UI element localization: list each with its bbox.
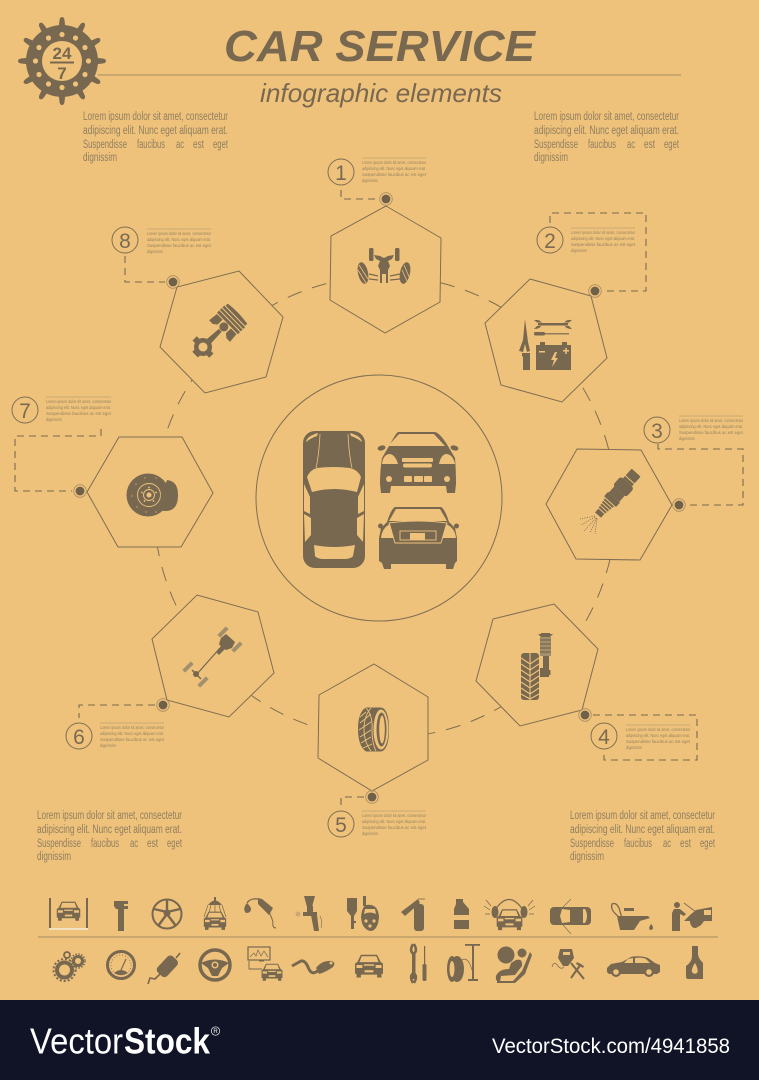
- text block: bottom right: [570, 810, 716, 863]
- callout: connector 1: 1: [335, 162, 347, 185]
- panel: hexagon 2 battery and tools: [485, 279, 607, 402]
- callout: connector 7: 7: [19, 400, 31, 423]
- icon: oil bottle: [454, 899, 469, 929]
- callout: connector 5: dignissim: [362, 831, 378, 836]
- icon: fire extinguisher: [401, 899, 425, 931]
- callout: connector 1: [328, 158, 427, 205]
- text block: top left: Lorem ipsum dolor sit amet, consectetur: [83, 111, 228, 123]
- text block: top right: dignissim: [534, 152, 568, 164]
- callout: connector 1: Suspendisse faucibus ac est eget: [362, 172, 427, 177]
- text block: top left: adipiscing elit. Nunc eget aliquam erat.: [83, 125, 228, 137]
- callout: connector 8: adipiscing elit. Nunc eget aliquam erat.: [147, 237, 211, 242]
- callout: connector 3: 3: [651, 420, 663, 443]
- icon: vacuum hose: [292, 961, 334, 974]
- text block: bottom left: faucibus: [91, 838, 119, 850]
- callout: connector 6: Suspendisse faucibus ac est eget: [100, 737, 165, 742]
- title: CAR SERVICE: [224, 22, 537, 71]
- icon: 24/7 gear badge: 24: [53, 44, 72, 63]
- callout: connector 7: Lorem ipsum dolor sit amet, consectetur: [46, 399, 111, 404]
- icon: spray gun: [296, 896, 322, 931]
- callout: connector 6: dignissim: [100, 743, 116, 748]
- panel: hexagon 5 tyre: [318, 664, 428, 791]
- text block: top right: Suspendisse: [534, 139, 578, 151]
- panel: hexagon 6 chassis: [152, 595, 274, 717]
- callout: connector 7: adipiscing elit. Nunc eget aliquam erat.: [46, 405, 111, 410]
- icon: chassis drivetrain: [182, 626, 243, 688]
- icon: muffler exhaust: [148, 953, 180, 984]
- car: rear view: [378, 507, 459, 569]
- text block: bottom left: dignissim: [37, 851, 71, 863]
- callout: connector 5: Lorem ipsum dolor sit amet, consectetur: [362, 813, 426, 818]
- footer logo: R: [213, 1029, 218, 1035]
- text block: top left: eget: [213, 139, 229, 151]
- icon: 24/7 gear badge: [18, 17, 106, 105]
- icon: car wash: [204, 897, 226, 930]
- text block: top right: ac: [627, 139, 635, 151]
- callout: connector 1: dignissim: [362, 178, 378, 183]
- callout: connector 8: [112, 227, 212, 288]
- callout: connector 5: adipiscing elit. Nunc eget aliquam erat.: [362, 819, 426, 824]
- text block: top left: ac: [176, 139, 184, 151]
- callout: connector 4: [579, 709, 697, 760]
- icon: car lift: [49, 898, 88, 930]
- callout: connector 3: Lorem ipsum dolor sit amet, consectetur: [679, 418, 743, 423]
- callout: connector 2: adipiscing elit. Nunc eget aliquam erat.: [571, 236, 635, 241]
- text block: top left: dignissim: [83, 152, 117, 164]
- callout: connector 4: 4: [598, 726, 610, 749]
- callout: connector 4: dignissim: [626, 745, 642, 750]
- text block: bottom left: Suspendisse: [37, 838, 81, 850]
- callout: connector 6: [66, 699, 169, 749]
- text block: bottom left: eget: [167, 838, 183, 850]
- text block: bottom left: adipiscing elit. Nunc eget aliquam erat.: [37, 824, 182, 836]
- icon: adjustable wrench: [114, 901, 128, 931]
- central circle with cars: [256, 375, 502, 621]
- callout: connector 2: [537, 213, 646, 297]
- car: front view: [377, 432, 459, 493]
- text block: bottom right: faucibus: [624, 838, 652, 850]
- footer url: VectorStock.com/4941858: [492, 1035, 730, 1058]
- callout: connector 8: Suspendisse faucibus ac est eget: [147, 243, 212, 248]
- callout: connector 5: Suspendisse faucibus ac est eget: [362, 825, 427, 830]
- icon: spark plug: [580, 467, 643, 534]
- callout: connector 1: Lorem ipsum dolor sit amet, consectetur: [362, 160, 426, 165]
- text block: bottom right: est: [680, 838, 692, 850]
- dashed ring connecting hexagons: [154, 276, 616, 738]
- subtitle: infographic elements: [260, 78, 502, 108]
- icon: car key and alarm fob: [347, 896, 379, 931]
- text block: bottom left: ac: [130, 838, 138, 850]
- panel: hexagon 8 piston: [160, 271, 283, 393]
- icon: 24/7 gear badge: 7: [57, 64, 67, 83]
- icon: sedan side view: [607, 956, 660, 977]
- callout: connector 7: Suspendisse faucibus ac est eget: [46, 411, 112, 416]
- panel: hexagon 7 brake disc: [87, 437, 213, 547]
- callout: connector 5: 5: [335, 814, 347, 837]
- callout: connector 3: [644, 416, 744, 511]
- text block: top right: adipiscing elit. Nunc eget aliquam erat.: [534, 125, 679, 137]
- icon: tyre: [358, 708, 389, 752]
- icon: welding mask and hammers: [552, 949, 584, 979]
- text block: bottom right: ac: [663, 838, 671, 850]
- text block: bottom right: eget: [700, 838, 716, 850]
- icon: alloy wheel: [152, 900, 182, 928]
- icon: gears: [54, 952, 85, 981]
- footer logo: Vector: [30, 1020, 123, 1062]
- text block: top right: [534, 111, 680, 164]
- icon: tyre and air pump: [447, 944, 480, 982]
- callout: connector 7: dignissim: [46, 417, 62, 422]
- footer logo: [30, 1020, 220, 1062]
- text block: top left: faucibus: [137, 139, 165, 151]
- panel: hexagon 1 suspension: [330, 206, 441, 333]
- callout: connector 6: Lorem ipsum dolor sit amet, consectetur: [100, 725, 164, 730]
- text block: bottom left: [37, 810, 183, 863]
- divider between icon rows: [38, 936, 718, 938]
- callout: connector 1: adipiscing elit. Nunc eget aliquam erat.: [362, 166, 426, 171]
- icon: oil bottle with drop: [686, 946, 703, 979]
- callout: connector 7: [12, 397, 112, 497]
- text block: top right: faucibus: [588, 139, 616, 151]
- callout: connector 8: dignissim: [147, 249, 163, 254]
- header rule: [98, 74, 681, 76]
- text block: top left: [83, 111, 229, 164]
- icon: car front: [355, 955, 383, 978]
- icon: battery, clamp, wrench and screwdriver: [519, 319, 572, 370]
- panel: hexagon 4 tyre and shock absorber: [476, 604, 598, 726]
- callout: connector 5: [328, 791, 427, 837]
- text block: top right: Lorem ipsum dolor sit amet, consectetur: [534, 111, 679, 123]
- panel: hexagon 3 spark plug: [546, 449, 672, 560]
- footer band: [0, 1000, 759, 1080]
- icon: piston and connecting rod: [185, 302, 249, 365]
- car: top view: [303, 431, 365, 568]
- icon: mechanic at open hood: [672, 902, 712, 931]
- icon: fuel nozzle and drop: [244, 898, 276, 928]
- callout: connector 3: Suspendisse faucibus ac est eget: [679, 430, 744, 435]
- callout: connector 4: Suspendisse faucibus ac est eget: [626, 739, 691, 744]
- icon: computer diagnostics: [248, 947, 282, 981]
- text block: top left: Suspendisse: [83, 139, 127, 151]
- callout: connector 2: 2: [544, 230, 556, 253]
- icon: tyre and shock absorber: [521, 633, 553, 700]
- icon: speedometer: [108, 952, 134, 978]
- callout: connector 2: Suspendisse faucibus ac est eget: [571, 242, 636, 247]
- callout: connector 4: Lorem ipsum dolor sit amet, consectetur: [626, 727, 690, 732]
- text block: top left: est: [193, 139, 205, 151]
- icon: front suspension: [356, 248, 412, 285]
- callout: connector 3: dignissim: [679, 436, 695, 441]
- callout: connector 2: dignissim: [571, 248, 587, 253]
- icon: car with sound headphones: [484, 900, 535, 930]
- callout: connector 4: adipiscing elit. Nunc eget aliquam erat.: [626, 733, 690, 738]
- callout: connector 3: adipiscing elit. Nunc eget aliquam erat.: [679, 424, 743, 429]
- callout: connector 2: Lorem ipsum dolor sit amet, consectetur: [571, 230, 635, 235]
- icon: airbag seat: [496, 946, 532, 983]
- text block: bottom right: Suspendisse: [570, 838, 614, 850]
- text block: bottom left: Lorem ipsum dolor sit amet, consectetur: [37, 810, 182, 822]
- icon: steering wheel: [200, 950, 230, 980]
- text block: top right: est: [644, 139, 656, 151]
- callout: connector 6: adipiscing elit. Nunc eget aliquam erat.: [100, 731, 164, 736]
- text block: bottom left: est: [147, 838, 159, 850]
- icon: wrench and screwdriver: [411, 944, 426, 983]
- callout: connector 6: 6: [73, 726, 85, 749]
- text block: bottom right: dignissim: [570, 851, 604, 863]
- text block: top right: eget: [664, 139, 680, 151]
- footer logo: Stock: [124, 1020, 211, 1062]
- callout: connector 8: 8: [119, 230, 131, 253]
- icon: brake disc: [126, 474, 178, 516]
- icon: oil can: [612, 904, 653, 930]
- icon: open door car top view: [550, 899, 591, 934]
- callout: connector 8: Lorem ipsum dolor sit amet, consectetur: [147, 231, 211, 236]
